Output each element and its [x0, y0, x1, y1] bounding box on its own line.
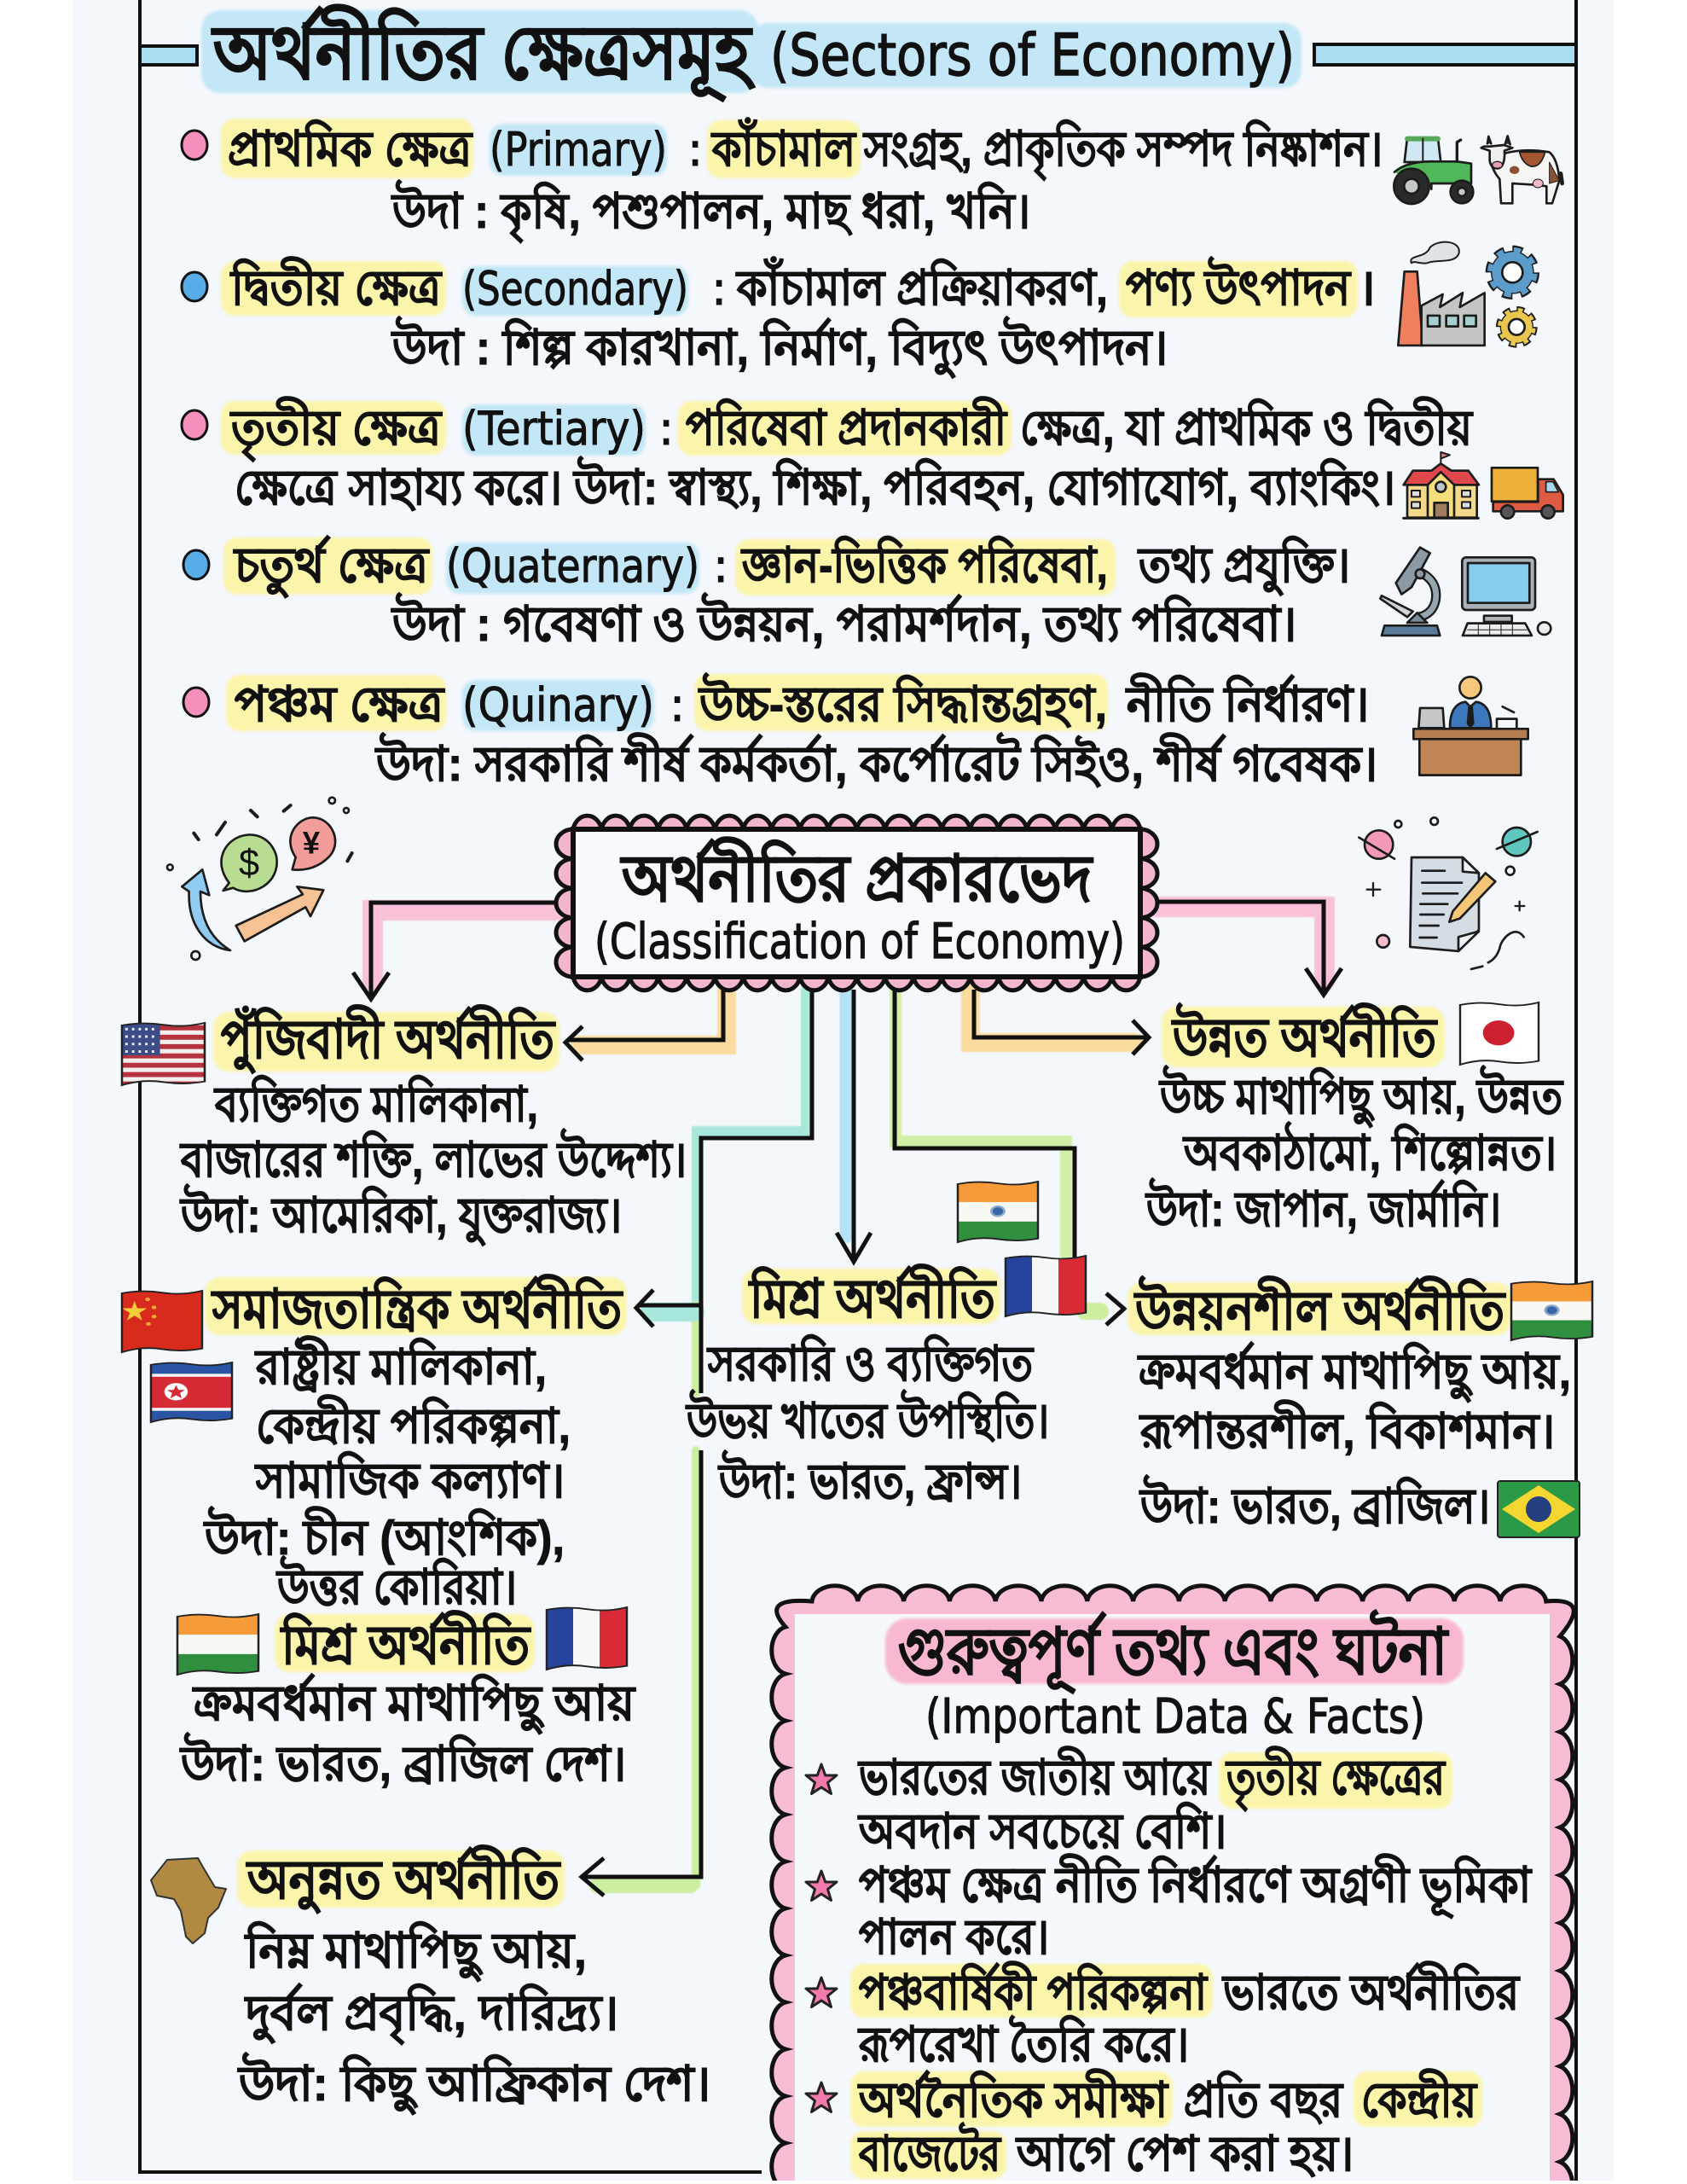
panel: socialist economy: উত্তর কোরিয়া।	[275, 1555, 517, 1615]
panel: mixed economy: উভয় খাতের উপস্থিতি।	[685, 1389, 1049, 1449]
icon: Africa map	[151, 1858, 226, 1943]
panel: mixed economy: উদা: ভারত, ফ্রান্স।	[717, 1449, 1022, 1509]
icon: US flag	[122, 1023, 205, 1085]
panel: secondary sector: উদা : শিল্প কারখানা, নির্মাণ, বিদ্যুৎ উৎপাদন।	[391, 316, 1168, 380]
panel: primary sector: উদা : কৃষি, পশুপালন, মাছ ধরা, খনি।	[391, 179, 1030, 244]
panel: developed economy: উন্নত অর্থনীতি	[1171, 1002, 1438, 1068]
icon: money and growth: $	[239, 843, 259, 884]
panel: underdeveloped economy: উদা: কিছু আফ্রিকান দেশ।	[237, 2052, 710, 2116]
central classification box: (Classification of Economy)	[594, 914, 1125, 970]
panel: tertiary sector: (Tertiary)	[462, 402, 646, 456]
panel: quaternary sector: উদা : গবেষণা ও উন্নয়ন, পরামর্শদান, তথ্য পরিষেবা।	[391, 592, 1296, 652]
panel: capitalist economy	[179, 1005, 687, 1247]
title English: (Sectors of Economy)	[770, 22, 1295, 90]
panel: mixed economy	[685, 1264, 1049, 1509]
icon: China flag	[122, 1291, 202, 1352]
fact 1	[806, 1746, 1452, 1859]
panel: important data and facts: গুরুত্বপূর্ণ তথ্য এবং ঘটনা	[898, 1609, 1450, 1694]
arrow: to developed economy	[1151, 902, 1342, 995]
panel: quinary sector: উচ্চ-স্তরের সিদ্ধান্তগ্রহণ,	[698, 672, 1107, 732]
panel: primary sector: (Primary)	[490, 123, 667, 177]
panel: quaternary sector: (Quaternary)	[446, 539, 699, 593]
title rule left	[140, 46, 197, 65]
panel: quaternary sector: তথ্য প্রযুক্তি।	[1137, 536, 1350, 597]
fact 4: কেন্দ্রীয়	[1361, 2069, 1478, 2128]
icon: cow	[1481, 136, 1562, 203]
panel: underdeveloped economy: দুর্বল প্রবৃদ্ধি, দারিদ্র্য।	[244, 1982, 618, 2045]
panel: lower mixed economy: ক্রমবর্ধমান মাথাপিছু আয়	[192, 1672, 636, 1735]
panel: tertiary sector: তৃতীয় ক্ষেত্র	[229, 397, 443, 462]
icon: North Korea flag	[151, 1362, 232, 1422]
panel: primary sector: সংগ্রহ, প্রাকৃতিক সম্পদ নিষ্কাশন।	[862, 119, 1383, 182]
panel: lower mixed economy: মিশ্র অর্থনীতি	[280, 1611, 531, 1676]
panel: developed economy: উচ্চ মাথাপিছু আয়, উন্নত	[1158, 1065, 1564, 1129]
icon: France flag center	[1006, 1256, 1086, 1316]
fact 2: পালন করে।	[859, 1910, 1049, 1965]
panel: developing economy	[1128, 1275, 1571, 1534]
arrow: blue to mixed economy	[837, 990, 871, 1262]
panel: underdeveloped economy: অনুন্নত অর্থনীতি	[246, 1845, 561, 1914]
panel: socialist economy: কেন্দ্রীয় পরিকল্পনা,	[256, 1395, 571, 1454]
icon: person at desk	[1413, 677, 1528, 775]
panel: secondary sector: (Secondary)	[462, 262, 688, 316]
panel: developed economy: অবকাঠামো, শিল্পোন্নত।	[1182, 1121, 1557, 1181]
icon: money and growth	[167, 798, 352, 960]
fact 4: বাজেটের	[857, 2122, 1001, 2181]
facts subtitle: (Important Data & Facts)	[925, 1689, 1425, 1745]
icon: Brazil flag	[1498, 1481, 1580, 1537]
panel: socialist economy: রাষ্ট্রীয় মালিকানা,	[254, 1336, 547, 1395]
central classification box	[556, 816, 1157, 990]
panel: primary sector: :	[687, 123, 703, 177]
fact 4: অর্থনৈতিক সমীক্ষা	[857, 2069, 1169, 2128]
panel: developing economy: ক্রমবর্ধমান মাথাপিছু আয়,	[1137, 1340, 1571, 1403]
icon: microscope	[1380, 548, 1440, 636]
icon: Japan flag	[1460, 1002, 1539, 1065]
fact 2: পঞ্চম ক্ষেত্র নীতি নির্ধারণে অগ্রণী ভূমিকা	[859, 1854, 1533, 1920]
fact 3	[806, 1961, 1520, 2072]
arrow: orange right branch	[971, 990, 1149, 1054]
icon: tractor	[1394, 138, 1473, 204]
panel: underdeveloped economy: নিম্ন মাথাপিছু আয়,	[244, 1921, 587, 1983]
panel: socialist economy: সমাজতান্ত্রিক অর্থনীতি	[211, 1275, 623, 1339]
panel: tertiary sector	[182, 397, 1474, 515]
fact 1: তৃতীয় ক্ষেত্রের	[1225, 1746, 1446, 1812]
panel: capitalist economy: ব্যক্তিগত মালিকানা,	[213, 1075, 538, 1132]
central classification box: অর্থনীতির প্রকারভেদ	[619, 836, 1094, 915]
panel: tertiary sector: ক্ষেত্র, যা প্রাথমিক ও দ্বিতীয়	[1020, 397, 1474, 456]
panel: quaternary sector: :	[713, 539, 728, 593]
fact 3: ভারতে অর্থনীতির	[1221, 1961, 1520, 2020]
arrow: to capitalist economy	[353, 903, 563, 999]
panel: lower mixed economy: উদা: ভারত, ব্রাজিল দেশ।	[179, 1732, 626, 1792]
panel: mixed economy: সরকারি ও ব্যক্তিগত	[706, 1334, 1035, 1391]
panel: capitalist economy: পুঁজিবাদী অর্থনীতি	[221, 1005, 556, 1074]
panel: capitalist economy: বাজারের শক্তি, লাভের উদ্দেশ্য।	[179, 1128, 687, 1188]
arrow: green to developing economy	[895, 990, 1124, 1325]
panel: important data and facts	[772, 1586, 1574, 2184]
arrow: orange left branch	[565, 990, 727, 1060]
panel: quinary sector: উদা: সরকারি শীর্ষ কর্মকর্তা, কর্পোরেট সিইও, শীর্ষ গবেষক।	[374, 732, 1377, 792]
panel: quaternary sector: জ্ঞান-ভিত্তিক পরিষেবা,	[740, 536, 1108, 593]
fact 1: ভারতের জাতীয় আয়ে	[857, 1746, 1212, 1805]
title	[140, 3, 1576, 102]
panel: quinary sector	[183, 672, 1377, 792]
panel: developed economy	[1145, 1002, 1564, 1237]
panel: developing economy: উন্নয়নশীল অর্থনীতি	[1133, 1275, 1506, 1341]
panel: secondary sector: দ্বিতীয় ক্ষেত্র	[229, 257, 443, 316]
panel: socialist economy: সামাজিক কল্যাণ।	[254, 1451, 565, 1508]
icon: India flag right	[1511, 1281, 1592, 1340]
icon: France flag lower	[547, 1607, 627, 1670]
panel: socialist economy	[203, 1275, 627, 1615]
facts title	[885, 1618, 1464, 1684]
panel: developing economy: উদা: ভারত, ব্রাজিল।	[1139, 1474, 1490, 1534]
fact 3: রূপরেখা তৈরি করে।	[857, 2014, 1189, 2072]
panel: primary sector	[182, 118, 1383, 244]
fact 1: অবদান সবচেয়ে বেশি।	[857, 1802, 1226, 1859]
icon: computer	[1462, 557, 1551, 636]
panel: secondary sector	[182, 256, 1375, 380]
fact 4	[806, 2069, 1482, 2181]
panel: socialist economy: উদা: চীন (আংশিক),	[203, 1506, 565, 1565]
panel: tertiary sector: :	[658, 402, 674, 456]
panel: quinary sector: নীতি নির্ধারণ।	[1125, 673, 1369, 732]
icon: gears	[1491, 251, 1534, 344]
panel: quaternary sector	[183, 534, 1350, 652]
panel: developing economy: রূপান্তরশীল, বিকাশমান।	[1139, 1400, 1555, 1459]
panel: secondary sector: :	[711, 262, 727, 316]
panel: quaternary sector: চতুর্থ ক্ষেত্র	[233, 534, 430, 600]
panel: developed economy: উদা: জাপান, জার্মানি।	[1145, 1177, 1501, 1237]
panel: quinary sector: পঞ্চম ক্ষেত্র	[235, 677, 445, 732]
panel: secondary sector: কাঁচামাল প্রক্রিয়াকরণ,	[735, 257, 1108, 316]
icon: truck	[1492, 468, 1563, 519]
panel: secondary sector: ।	[1358, 261, 1375, 316]
panel: lower mixed economy	[179, 1611, 636, 1792]
title Bengali: অর্থনীতির ক্ষেত্রসমূহ	[211, 3, 756, 102]
panel: underdeveloped economy	[237, 1845, 710, 2116]
panel: secondary sector: পণ্য উৎপাদন	[1126, 256, 1352, 316]
icon: factory	[1398, 242, 1485, 346]
panel: capitalist economy: উদা: আমেরিকা, যুক্তরাজ্য।	[179, 1183, 622, 1247]
fact 2	[806, 1854, 1533, 1965]
panel: mixed economy: মিশ্র অর্থনীতি	[748, 1264, 997, 1329]
icon: India flag top	[958, 1182, 1038, 1242]
panel: primary sector: প্রাথমিক ক্ষেত্র	[228, 119, 473, 177]
panel: quinary sector: (Quinary)	[462, 678, 654, 732]
panel: quinary sector: :	[670, 678, 685, 732]
icon: money and growth: ¥	[303, 826, 321, 861]
fact 4: প্রতি বছর	[1184, 2071, 1343, 2128]
title rule right	[1314, 44, 1576, 65]
fact 4: আগে পেশ করা হয়।	[1015, 2127, 1354, 2181]
icon: school	[1404, 452, 1479, 518]
panel: tertiary sector: ক্ষেত্রে সাহায্য করে। উদা: স্বাস্থ্য, শিক্ষা, পরিবহন, যোগাযোগ, ব্যাংকিং।	[235, 456, 1395, 515]
panel: tertiary sector: পরিষেবা প্রদানকারী	[686, 397, 1007, 456]
icon: India flag lower	[177, 1614, 258, 1675]
arrow: teal branch to socialist and underdeveloped economy	[582, 990, 812, 1896]
icon: document and planets	[1359, 817, 1538, 969]
panel: primary sector: কাঁচামাল	[710, 118, 857, 177]
fact 3: পঞ্চবার্ষিকী পরিকল্পনা	[859, 1961, 1209, 2020]
